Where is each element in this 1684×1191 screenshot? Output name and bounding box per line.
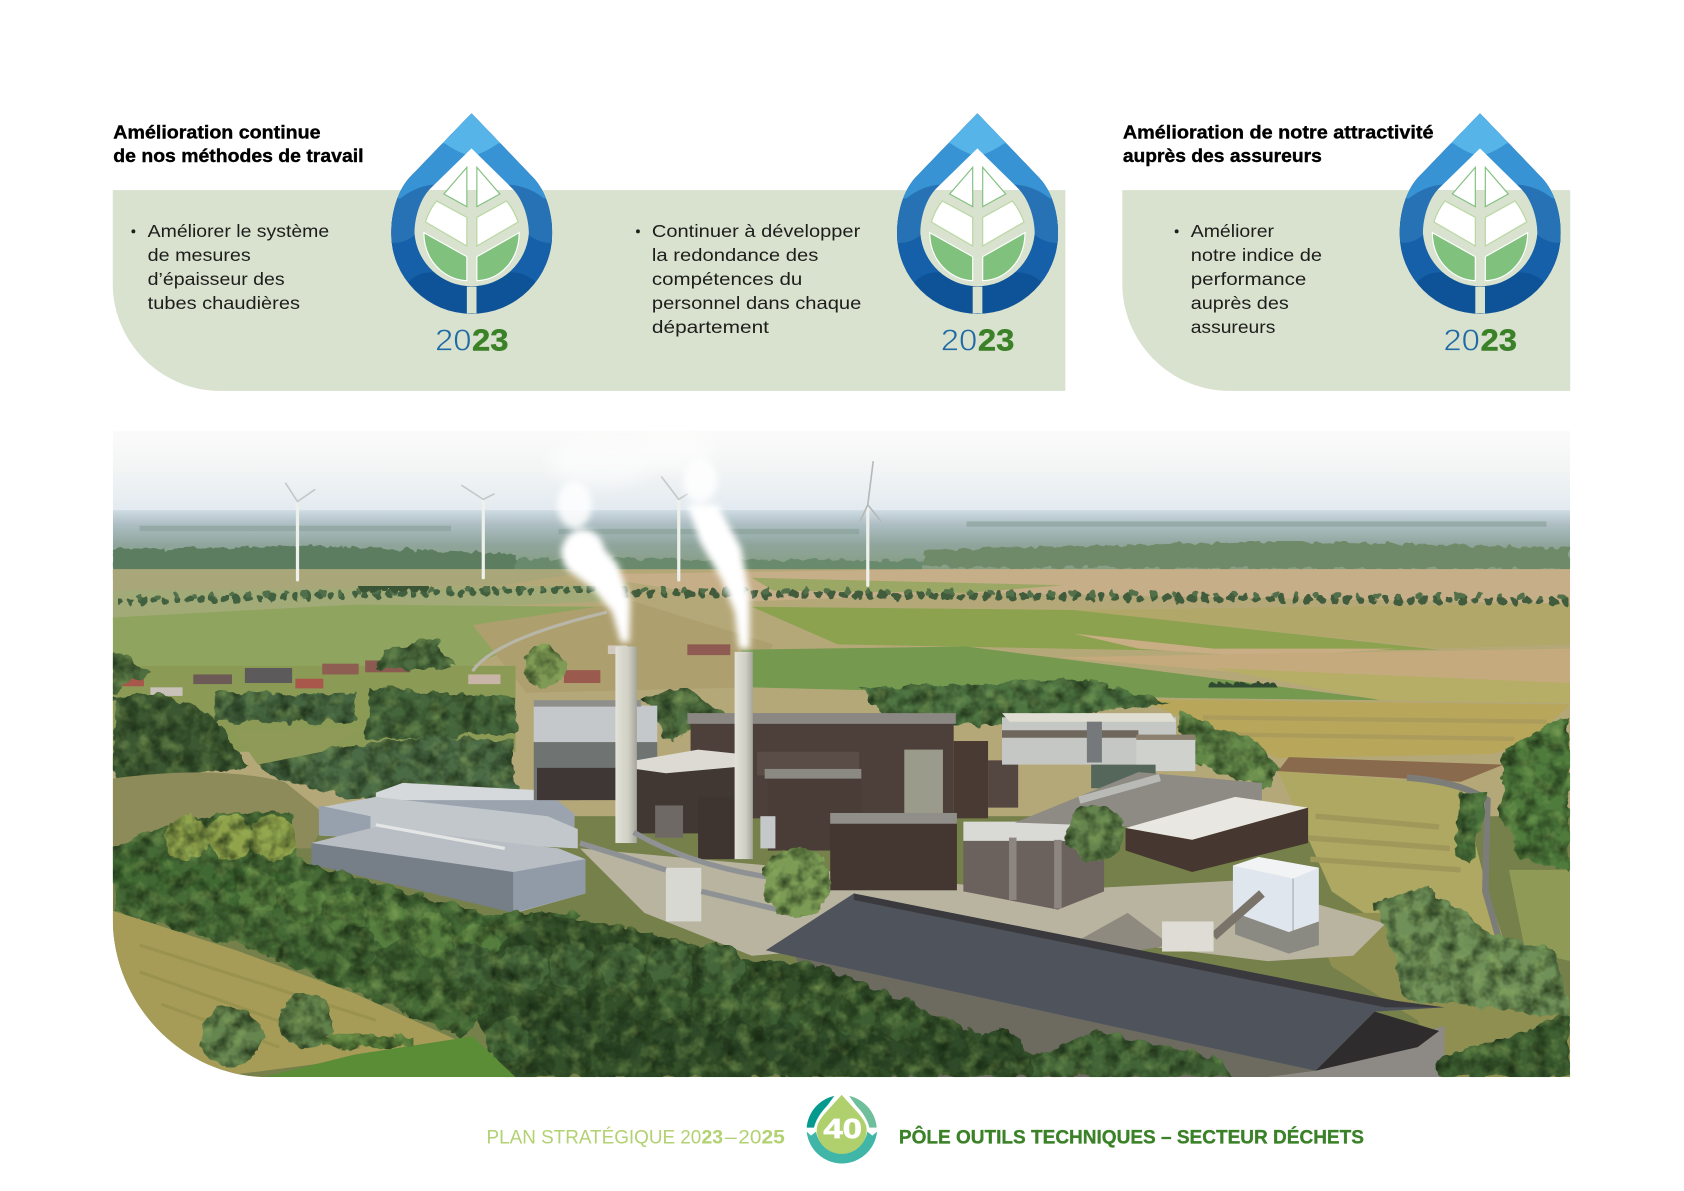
- chimneys: [580, 647, 800, 921]
- light yard around the plant: [580, 848, 1385, 961]
- main brown incinerator buildings: [636, 713, 1018, 890]
- smoke plumes: [556, 462, 755, 652]
- foreground trees: [113, 717, 1570, 1077]
- footer: pôle outils techniques: PÔLE OUTILS TECHNIQUES – SECTEUR DÉCHETS: [899, 1124, 1364, 1148]
- text block: redondance des compétences: Continuer à développer: [652, 221, 860, 241]
- heading: amélioration continue: [113, 121, 364, 166]
- tree rows in the fields: [118, 586, 1568, 687]
- icon: drop and leaf 2023 second: 20: [941, 323, 977, 358]
- right buildings: [1002, 713, 1308, 872]
- text block: système de mesures: de mesures: [148, 245, 251, 265]
- text block: indice de performance: [1175, 221, 1322, 337]
- text block: indice de performance: notre indice de: [1191, 245, 1322, 265]
- photo: aerial view of the waste treatment plant: [113, 431, 1570, 1077]
- text block: système de mesures: [131, 221, 329, 313]
- text block: système de mesures: tubes chaudières: [148, 293, 300, 313]
- heading: amélioration continue: Amélioration continue: [113, 121, 321, 142]
- infographic page: [112, 113, 1570, 1164]
- text block: système de mesures: Améliorer le système: [148, 221, 329, 241]
- stacks base gray building: [534, 700, 657, 800]
- icon: drop and leaf 2023 second: 23: [978, 323, 1014, 358]
- cooling towers: [963, 822, 1104, 910]
- text block: indice de performance: performance: [1191, 269, 1307, 289]
- heading: attractivité auprès des assureurs: Amélioration de notre attractivité: [1123, 121, 1434, 142]
- heading: attractivité auprès des assureurs: auprès des assureurs: [1123, 145, 1322, 166]
- icon: drop and leaf 2023 first: 23: [472, 323, 509, 358]
- icon: drop and leaf 2023 third: 23: [1480, 323, 1517, 358]
- panel: attractivité background: [1122, 190, 1570, 391]
- large slate roof: [766, 894, 1445, 1077]
- footer: plan stratégique: 20: [738, 1126, 762, 1148]
- text block: redondance des compétences: [636, 221, 861, 337]
- heading: amélioration continue: de nos méthodes de travail: [113, 145, 364, 166]
- icon: drop and leaf 2023 first: [381, 100, 567, 358]
- panel: méthodes de travail and compétences background: [113, 190, 1065, 391]
- trees around the village: [113, 639, 1280, 800]
- footer: plan stratégique: PLAN STRATÉGIQUE 20: [487, 1125, 701, 1148]
- icon: drop and leaf 2023 third: 20: [1443, 323, 1480, 358]
- footer: plan stratégique: 25: [761, 1126, 785, 1148]
- footer: plan stratégique: –: [725, 1126, 737, 1148]
- icon: drop and leaf 2023 first: 20: [435, 323, 471, 358]
- text block: indice de performance: assureurs: [1191, 317, 1276, 337]
- text block: indice de performance: Améliorer: [1191, 221, 1274, 241]
- text block: redondance des compétences: compétences du: [652, 269, 802, 289]
- text block: redondance des compétences: la redondance des: [652, 245, 819, 265]
- icon: drop and leaf 2023 third: [1389, 100, 1576, 358]
- hill and mown lawn on the left: [112, 746, 331, 848]
- text block: système de mesures: d’épaisseur des: [148, 269, 285, 289]
- meadow in the bottom left: [113, 911, 516, 1077]
- text block: redondance des compétences: personnel dans chaque: [652, 293, 861, 313]
- icon: drop and leaf 2023 second: [886, 100, 1073, 358]
- text block: indice de performance: auprès des: [1191, 293, 1289, 313]
- bushes in the meadow: [200, 993, 528, 1067]
- village houses: [122, 644, 730, 696]
- footer logo: 40 drop with arrows: 40: [823, 1113, 862, 1144]
- text block: redondance des compétences: département: [652, 317, 769, 337]
- heading: attractivité auprès des assureurs: [1123, 121, 1434, 166]
- footer logo: 40 drop with arrows: [807, 1095, 877, 1163]
- right side lawn, fields and road: [1278, 757, 1570, 1077]
- white silo: [1074, 857, 1319, 954]
- wind turbines: [286, 462, 881, 585]
- silver storage halls: [311, 783, 585, 913]
- footer: plan stratégique: 23: [702, 1126, 723, 1148]
